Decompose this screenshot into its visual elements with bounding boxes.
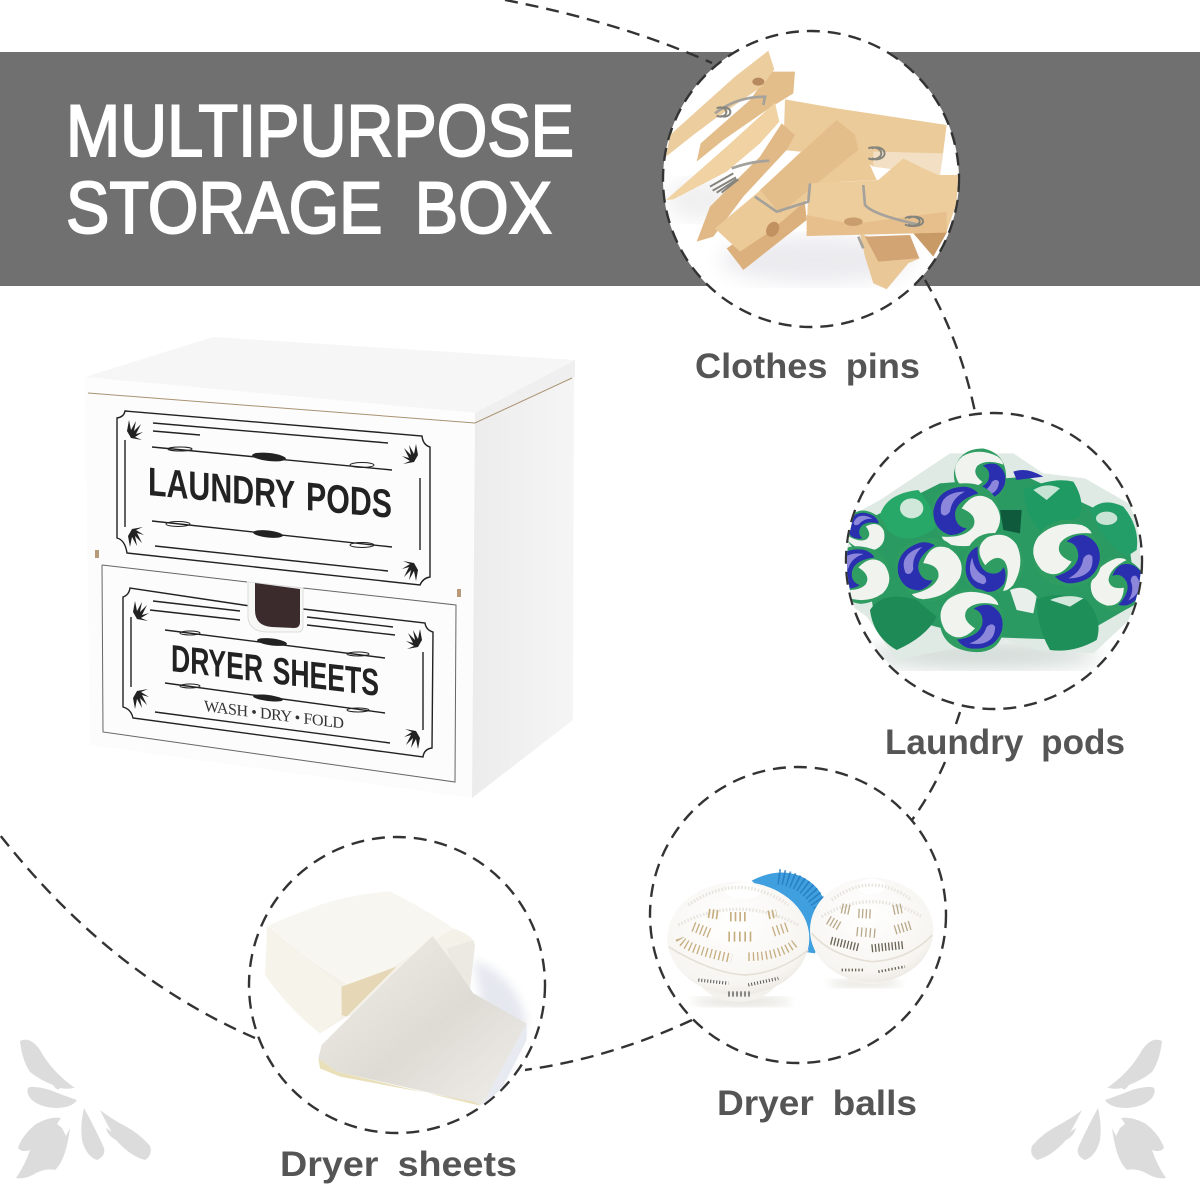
circle frame	[846, 413, 1142, 709]
panel: dryer sheets	[249, 837, 545, 1184]
stack	[266, 926, 472, 1033]
circle frame	[249, 837, 545, 1133]
header band	[0, 52, 1200, 286]
decorative leaf mark: left	[16, 1040, 151, 1178]
photo: wooden clothes pins	[666, 51, 958, 289]
label: dryer sheets	[123, 588, 433, 757]
label: Clothes pins	[695, 347, 920, 386]
label: Laundry pods	[885, 723, 1125, 762]
title: STORAGE BOX	[66, 168, 552, 249]
folded sheet	[318, 936, 527, 1105]
decorative leaf mark: right	[1031, 1040, 1166, 1178]
pegs	[95, 550, 461, 597]
circle frame	[663, 31, 959, 327]
box front	[85, 393, 475, 798]
photo: dryer balls	[667, 872, 933, 1006]
panel: dryer balls	[650, 767, 946, 1123]
box lid top	[85, 337, 575, 413]
label: dryer sheets: DRYER SHEETS	[171, 637, 379, 705]
title	[66, 91, 574, 249]
white ball left	[702, 986, 775, 996]
box lid sides	[85, 377, 475, 423]
circle frame	[650, 767, 946, 1063]
photo: laundry pods	[847, 448, 1141, 671]
drawer finger notch	[248, 582, 303, 632]
dashed connectors	[0, 0, 975, 1070]
label: laundry pods	[117, 411, 430, 585]
title: MULTIPURPOSE	[66, 91, 574, 172]
blue ball	[752, 872, 825, 953]
panel: clothes pins	[663, 31, 959, 386]
box side	[472, 377, 574, 798]
label: Dryer balls	[717, 1084, 917, 1123]
label: Dryer sheets	[280, 1145, 517, 1184]
label: dryer sheets: WASH • DRY • FOLD	[204, 698, 344, 732]
white ball right	[833, 929, 910, 984]
photo: dryer sheets	[265, 892, 527, 1106]
panel: laundry pods	[827, 413, 1155, 762]
drawer outline	[102, 565, 456, 782]
label: laundry pods: LAUNDRY PODS	[148, 460, 392, 527]
storage box	[85, 337, 575, 798]
